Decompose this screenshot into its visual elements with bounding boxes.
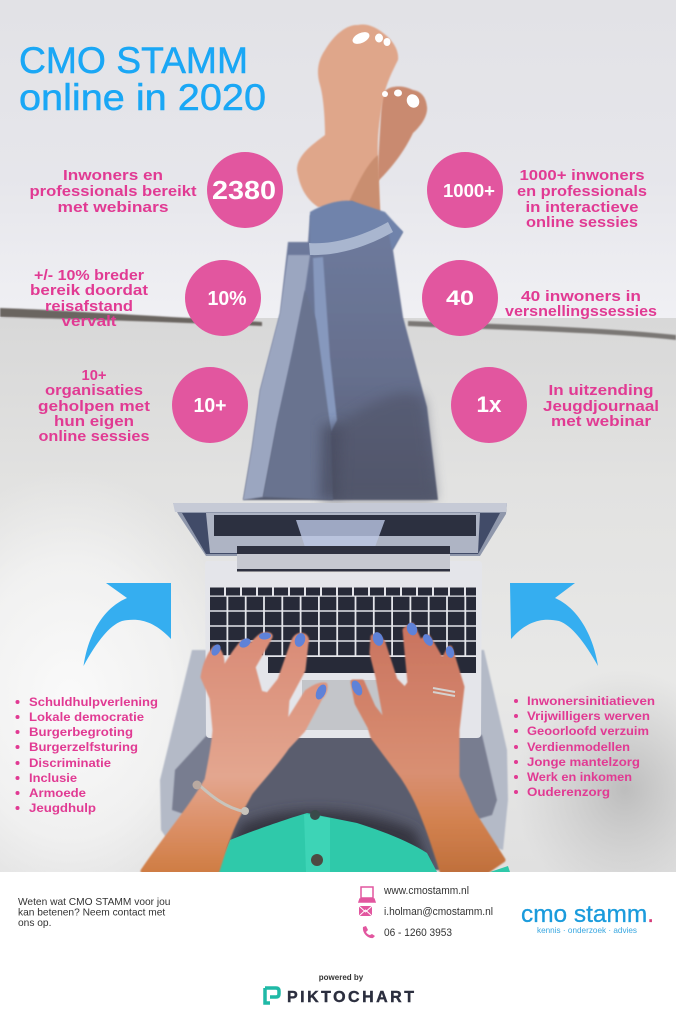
stat: 40: versnellingssessies: [505, 304, 657, 320]
contact details: 06 - 1260 3953: [384, 927, 452, 939]
stat: 1x: 1x: [476, 392, 502, 417]
stat: 10+: hun eigen: [54, 414, 134, 430]
powered by piktochart: [265, 973, 414, 1006]
icon: envelope: [359, 906, 372, 916]
list: left topics: [16, 695, 158, 815]
logo: cmo stamm: cmo stamm.: [521, 901, 654, 928]
stat: 2380 webinars: professionals bereikt: [30, 184, 197, 200]
icon: piktochart: [265, 988, 279, 1003]
figure: legs and feet: [243, 25, 438, 500]
list: left topics: Lokale democratie: [29, 710, 144, 724]
ring: [433, 688, 455, 696]
list: left topics: Schuldhulpverlening: [29, 695, 158, 709]
stat: 1000+ sessies: online sessies: [526, 215, 638, 231]
laptop lid: [173, 503, 507, 556]
stat: 10%: vervalt: [62, 314, 117, 330]
powered by piktochart: PIKTOCHART: [287, 989, 414, 1006]
list: right topics: Werk en inkomen: [527, 770, 632, 784]
stat: 1x: met webinar: [551, 414, 651, 430]
list: left topics: Jeugdhulp: [29, 801, 96, 815]
footer text: kan betenen? Neem contact met: [18, 908, 165, 918]
stat: 40: 40: [446, 287, 474, 310]
stat: 2380 webinars: 2380: [212, 175, 276, 205]
list: left topics: Burgerzelfsturing: [29, 740, 138, 754]
laptop hinge: [237, 546, 450, 554]
back foot: [377, 86, 427, 182]
toenails: [351, 30, 422, 110]
front foot: [297, 25, 398, 212]
keyboard: [210, 592, 476, 665]
list: left topics: Discriminatie: [29, 756, 111, 770]
stat: 1000+ sessies: 1000+ inwoners: [520, 168, 644, 184]
nails: [350, 621, 455, 697]
list: left topics: Inclusie: [29, 771, 77, 785]
icon: phone: [363, 926, 375, 938]
stat: 2380 webinars: met webinars: [58, 200, 168, 216]
stat: 1x: In uitzending: [548, 383, 654, 399]
right hand: [350, 621, 503, 871]
jeans legs: [243, 201, 438, 500]
stat: 40: 40 inwoners in: [521, 289, 641, 305]
laptop: [173, 503, 507, 738]
stat: 1000+ sessies: [427, 152, 647, 231]
title: online in 2020: [19, 77, 266, 118]
trackpad: [302, 680, 388, 730]
stat: 1000+ sessies: en professionals: [517, 184, 647, 200]
list: right topics: Geoorloofd verzuim: [527, 724, 649, 738]
nails: [210, 632, 328, 701]
shirt: [217, 813, 437, 872]
powered by piktochart: powered by: [319, 973, 364, 982]
list: right topics: Ouderenzorg: [527, 785, 610, 799]
stat: 1x: [451, 367, 659, 443]
left hand: [143, 632, 328, 871]
stat: 10+: online sessies: [38, 429, 150, 445]
logo: cmo stamm: kennis · onderzoek · advies: [537, 925, 637, 935]
stat: 10%: reisafstand: [45, 299, 133, 315]
footer text: Weten wat CMO STAMM voor jou: [18, 897, 170, 908]
contact details: [359, 885, 493, 939]
list: left topics: Armoede: [29, 786, 86, 800]
title: [19, 40, 266, 118]
stat: 10+: 10+: [82, 368, 106, 384]
lap and shirt: [160, 650, 510, 872]
list: right topics: Jonge mantelzorg: [527, 755, 640, 769]
stat: 10+: organisaties: [45, 383, 143, 399]
stat: 1000+ sessies: 1000+: [443, 181, 495, 201]
stat: 10%: [30, 260, 261, 336]
footer text: [18, 897, 170, 929]
stat: 10+: 10+: [194, 395, 226, 417]
stat: 1x: Jeugdjournaal: [543, 399, 659, 415]
list: right topics: Vrijwilligers werven: [527, 709, 650, 723]
arrow: right: [510, 583, 598, 666]
stat: 10%: +/- 10% breder: [34, 268, 144, 284]
list: left topics: Burgerbegroting: [29, 725, 133, 739]
list: right topics: [514, 694, 655, 799]
stat: 1000+ sessies: in interactieve: [526, 200, 638, 216]
footer text: ons op.: [18, 918, 51, 929]
footer panel: [0, 872, 676, 1024]
arrow: left: [84, 583, 171, 666]
contact details: www.cmostamm.nl: [383, 885, 469, 897]
stat: 2380 webinars: Inwoners en: [63, 168, 163, 184]
stat: 10%: 10%: [208, 288, 247, 310]
bracelet: [197, 783, 246, 812]
list: right topics: Inwonersinitiatieven: [527, 694, 655, 708]
jeans light panel: [243, 255, 310, 500]
laptop base: [205, 561, 482, 738]
stat: 10+: geholpen met: [38, 399, 150, 415]
jeans cuff: [310, 201, 403, 255]
stat: 10%: bereik doordat: [30, 283, 148, 299]
stat: 40: [422, 260, 657, 336]
title: CMO STAMM: [19, 40, 248, 81]
contact details: i.holman@cmostamm.nl: [384, 906, 493, 918]
stat: 10+: [38, 367, 248, 445]
icon: laptop: [359, 887, 375, 902]
list: right topics: Verdienmodellen: [527, 740, 630, 754]
stat: 2380 webinars: [30, 152, 283, 228]
